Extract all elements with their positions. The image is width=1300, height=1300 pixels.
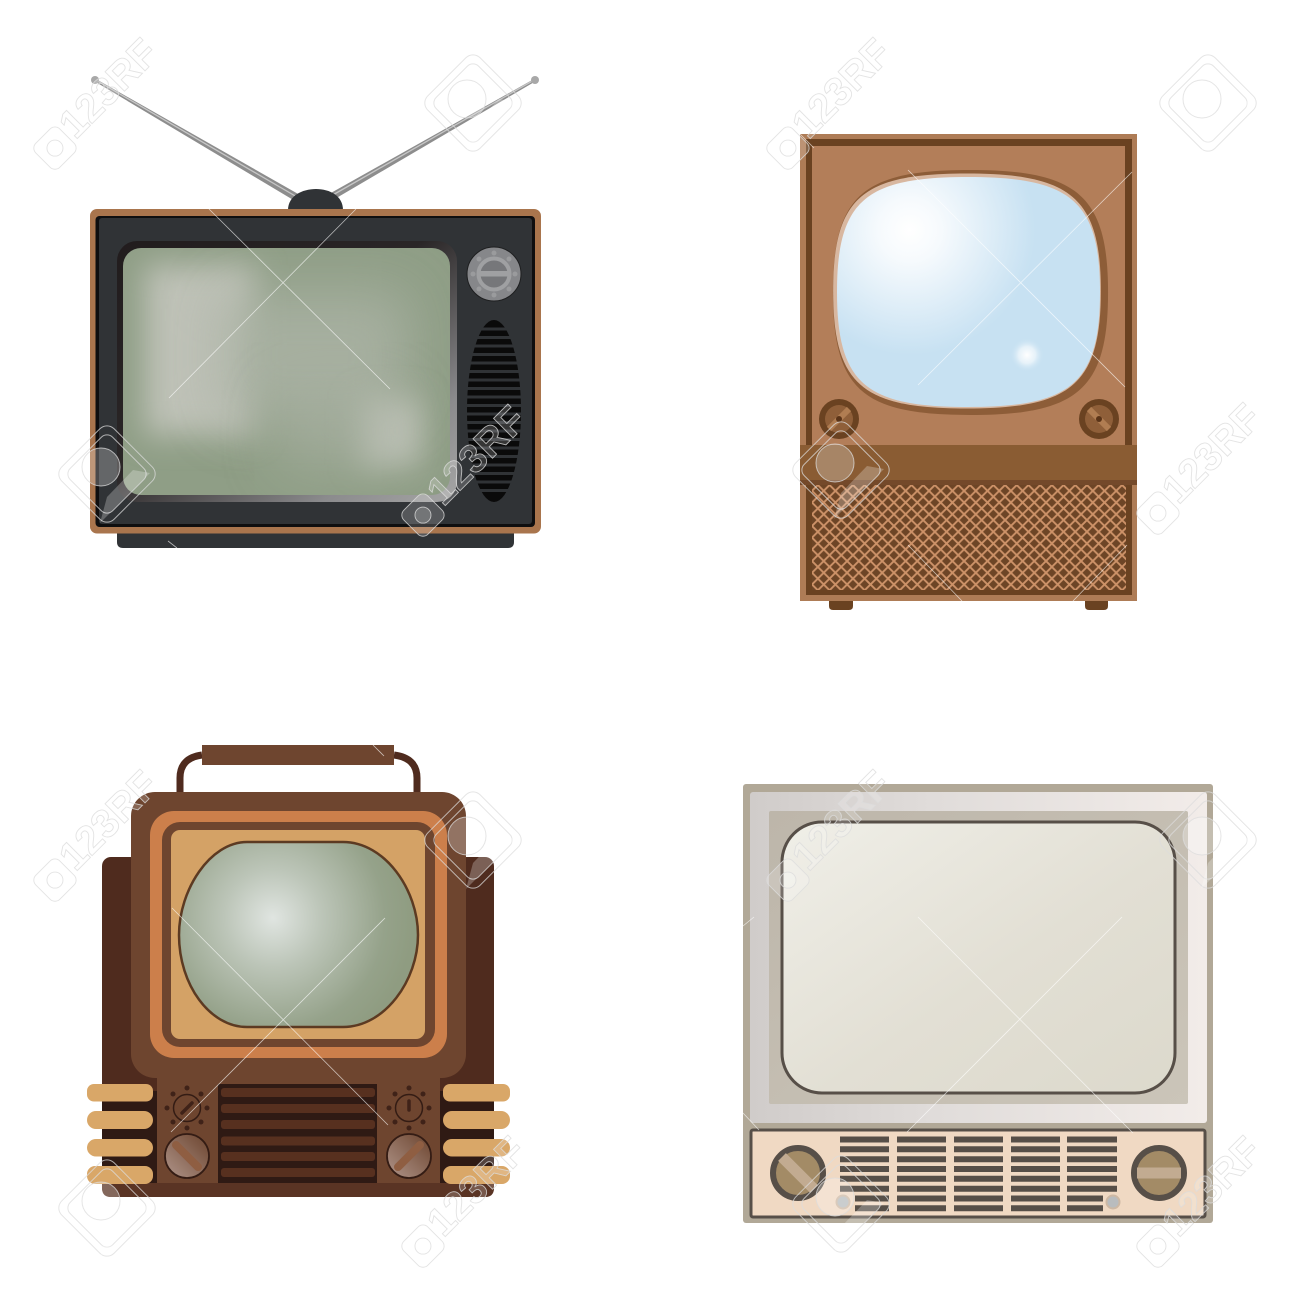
television: portable set with antennas: [90, 76, 541, 548]
carrying handle: [180, 745, 417, 794]
screen bezel: [833, 170, 1108, 415]
speaker grille: [465, 320, 523, 502]
feet: [829, 600, 1108, 610]
right control panel: [377, 1084, 440, 1183]
screen: [837, 177, 1100, 407]
orange ring: [150, 811, 447, 1058]
speaker slots: [840, 1136, 1117, 1211]
television: bakelite tabletop set: [87, 745, 510, 1197]
left tan fins: [87, 1084, 153, 1184]
rear body: [102, 857, 494, 1197]
cabinet: [800, 134, 1137, 601]
lower grille: [218, 1084, 377, 1183]
watermark: stock logos: 123RF: [419, 398, 535, 514]
screen: [782, 822, 1175, 1093]
wooden cabinet: [90, 209, 541, 534]
television: wooden console: [800, 134, 1137, 610]
right knob: [1079, 399, 1119, 439]
speaker grille: [812, 485, 1126, 590]
watermark: stock logos: 123RF: [1154, 396, 1270, 512]
cabinet: [743, 784, 1213, 1223]
tuning knob: [467, 247, 521, 301]
stand: [117, 530, 514, 548]
watermark: stock logos: 123RF: [51, 763, 167, 879]
left control panel: [157, 1084, 218, 1183]
control band: [800, 445, 1137, 480]
watermark: stock logos: 123RF: [1154, 1129, 1270, 1245]
right tan fins: [443, 1084, 510, 1184]
tan mask: [171, 830, 425, 1039]
watermark: stock logos: 123RF: [419, 1129, 535, 1245]
screen: [179, 842, 418, 1027]
screen: [123, 248, 450, 495]
left knob: [819, 399, 859, 439]
right knob: [1134, 1148, 1184, 1198]
watermark guide lines: [168, 134, 1133, 1133]
inner recess: [769, 811, 1188, 1104]
left knob: [773, 1148, 823, 1198]
control panel: [751, 1130, 1205, 1217]
antennas: [91, 76, 539, 210]
watermark: stock logos: 123RF: [784, 763, 900, 879]
front housing: [131, 792, 466, 1078]
television: cream flat-panel set: [743, 784, 1213, 1223]
light frame: [750, 792, 1207, 1123]
watermark: stock logos: 123RF: [51, 31, 167, 147]
screen reflection: [1010, 338, 1044, 372]
indicator lights: [836, 1196, 1120, 1208]
watermark: stock logos: 123RF: [784, 31, 900, 147]
screen bezel: [117, 241, 457, 502]
